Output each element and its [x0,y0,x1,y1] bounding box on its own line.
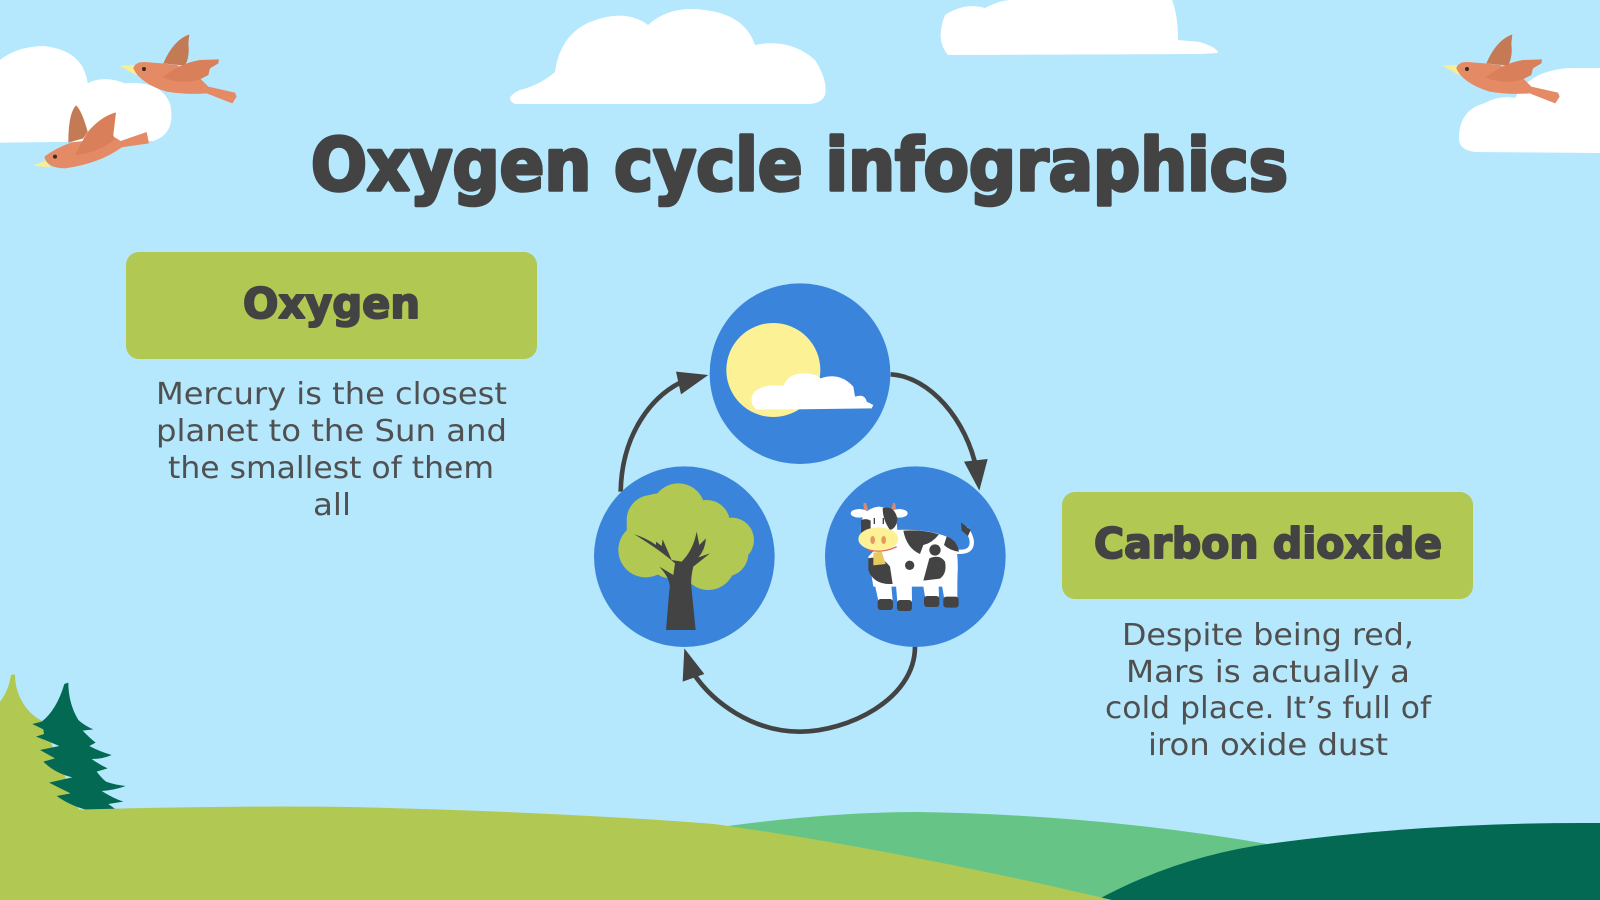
oxygen heading box [126,252,537,359]
oxygen heading: Oxygen [243,279,420,328]
icon: tree [618,483,754,630]
cycle diagram [594,283,1006,732]
cloud: top right [1459,68,1600,153]
carbon dioxide description [1105,618,1433,763]
icon: sun [726,323,820,417]
hill: dark green [1097,823,1600,900]
carbon dioxide description: Despite being red, [1122,618,1414,653]
bird: lower left [32,105,149,168]
hill: mid green [700,812,1290,900]
cloud: top left [0,46,171,143]
carbon dioxide heading box [1062,492,1473,599]
icon: cloud [751,373,873,409]
circle: cow [825,466,1006,647]
oxygen description: planet to the Sun and [156,414,507,449]
cloud: top right of centre [941,0,1218,55]
carbon dioxide description: cold place. It’s full of [1105,691,1433,726]
tree: dark green [32,683,126,811]
bird: upper left [119,34,237,103]
bird: right [1442,34,1560,103]
carbon dioxide description: Mars is actually a [1126,655,1410,690]
icon: cow [851,503,972,611]
oxygen description: the smallest of them [168,451,494,486]
arrow: cow to tree [683,647,915,732]
oxygen description: all [313,488,351,523]
panel: oxygen [126,252,537,523]
arrow: sun to cow [891,374,988,491]
carbon dioxide heading: Carbon dioxide [1094,519,1442,568]
panel: carbon dioxide [1062,492,1473,763]
carbon dioxide description: iron oxide dust [1148,728,1388,763]
arrow: tree to sun [621,372,708,492]
tree: light green [0,674,83,820]
circle: sun and cloud [710,283,890,464]
oxygen description: Mercury is the closest [156,377,507,412]
oxygen description [156,377,507,523]
circle: tree [594,466,775,647]
title: Oxygen cycle infographics [311,123,1288,207]
hill: light green [0,807,1112,900]
trees [0,674,126,820]
cloud: top centre [510,9,826,104]
